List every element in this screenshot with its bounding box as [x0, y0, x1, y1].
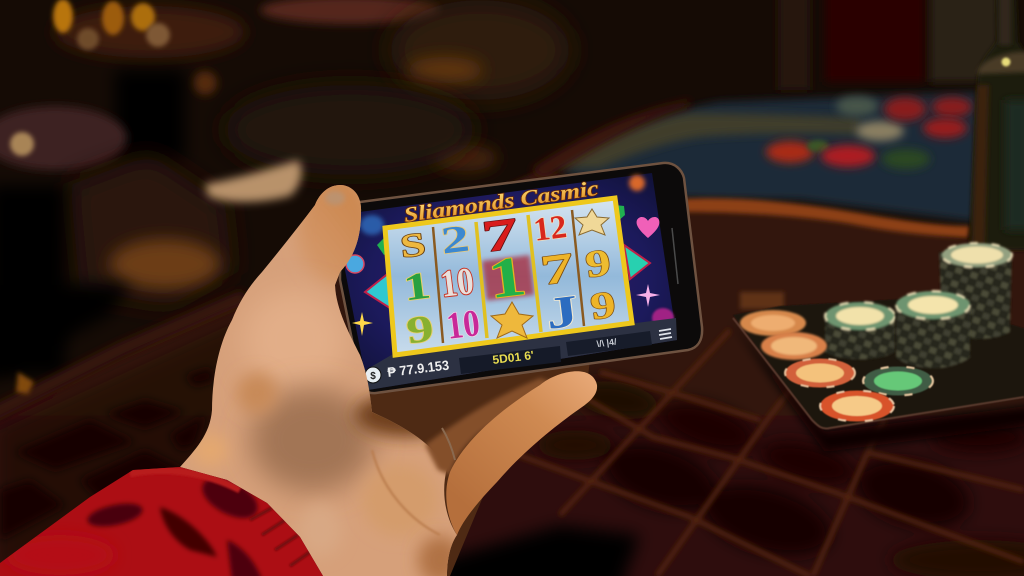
side button — [672, 228, 678, 284]
icon: right green gem — [615, 205, 625, 222]
symbols row 1: 2 — [439, 217, 472, 263]
back wall and curtains — [778, 0, 1000, 90]
symbols row 3: 9 — [404, 308, 436, 352]
chip stack right — [896, 291, 970, 368]
hand: thumb and palm heel — [180, 185, 457, 576]
velvet table surface — [0, 170, 1024, 576]
symbols row 1: 12 — [532, 209, 569, 249]
red highlight behind center symbol — [482, 255, 534, 301]
symbols row 1 — [399, 208, 609, 265]
icon: gold sparkle — [352, 312, 373, 336]
icon: pink blob — [652, 308, 674, 328]
velvet quilted tiles, left side — [0, 368, 215, 540]
symbols row 2 — [401, 242, 613, 311]
chip 5 — [820, 390, 894, 422]
tray edge — [733, 318, 1024, 429]
symbols row 2: 7 — [538, 245, 576, 295]
reel background — [385, 198, 632, 355]
icon: right gem — [624, 245, 650, 279]
red knitted sleeve — [0, 460, 330, 576]
coin glyph: $ — [370, 371, 376, 382]
icon: pink sparkle — [636, 284, 660, 307]
symbols row 2: 1 — [401, 265, 433, 309]
phone body — [340, 163, 702, 393]
back of hand and fingers behind phone — [340, 360, 590, 576]
credit display — [365, 357, 450, 383]
reel separators — [433, 210, 584, 343]
symbols row 2: 1 — [485, 245, 529, 311]
hand: index finger — [446, 371, 597, 535]
phone screen — [345, 173, 677, 390]
bokeh lights — [10, 0, 170, 156]
blue felt gaming table — [530, 92, 980, 222]
symbols row 1: 7 — [479, 208, 521, 262]
icon: blue glow — [360, 215, 384, 235]
chip 4: green — [863, 366, 933, 396]
game title: Sliamonds Casmic — [402, 176, 601, 227]
icon: left green gem — [377, 236, 390, 255]
glass bottle — [970, 0, 1024, 250]
symbols row 1: S — [399, 227, 428, 265]
smartphone — [340, 163, 702, 393]
icon: glow burst — [629, 175, 645, 191]
symbols row 3: 9 — [588, 284, 618, 328]
blurred object behind tray — [740, 292, 784, 309]
bottom control bar — [362, 318, 677, 390]
chip 2 — [761, 332, 827, 360]
bet text: \/\ |4/ — [596, 337, 618, 349]
symbols row 3: 10 — [444, 302, 482, 348]
credit value: ₱ 77.9.153 — [387, 357, 450, 380]
spin panel — [459, 346, 561, 374]
left table rail and orange glow — [0, 285, 245, 415]
spin text: 5D01 6' — [492, 348, 535, 367]
wedding ring — [442, 428, 455, 460]
back chip stack — [939, 243, 1012, 339]
tray body — [733, 298, 1024, 429]
symbols row 2: 10 — [438, 260, 476, 306]
reel frame — [385, 198, 632, 355]
chip 1 — [740, 310, 806, 336]
chip 3 — [785, 358, 855, 388]
icon: left gem — [365, 272, 393, 310]
icon: blue blob — [346, 255, 364, 273]
icon: heart — [637, 217, 659, 238]
symbols row 3 — [404, 284, 618, 352]
bet panel — [566, 331, 652, 356]
chip tray — [730, 292, 1024, 452]
blurred room furniture — [0, 0, 570, 375]
flat chips — [740, 310, 933, 422]
symbols row 3: J — [543, 285, 581, 339]
tray shadow — [730, 320, 1024, 452]
velvet quilted tiles, right side — [440, 330, 1024, 576]
icon: coin — [365, 367, 381, 383]
icon: menu — [659, 329, 672, 339]
hand: upper finger with ring — [425, 378, 560, 475]
screen decorations — [346, 175, 674, 336]
chip stack center — [825, 302, 895, 360]
table orange rim — [684, 198, 970, 238]
left velvet shade — [0, 320, 240, 570]
slot reels — [385, 198, 632, 355]
symbols row 2: 9 — [583, 242, 613, 286]
